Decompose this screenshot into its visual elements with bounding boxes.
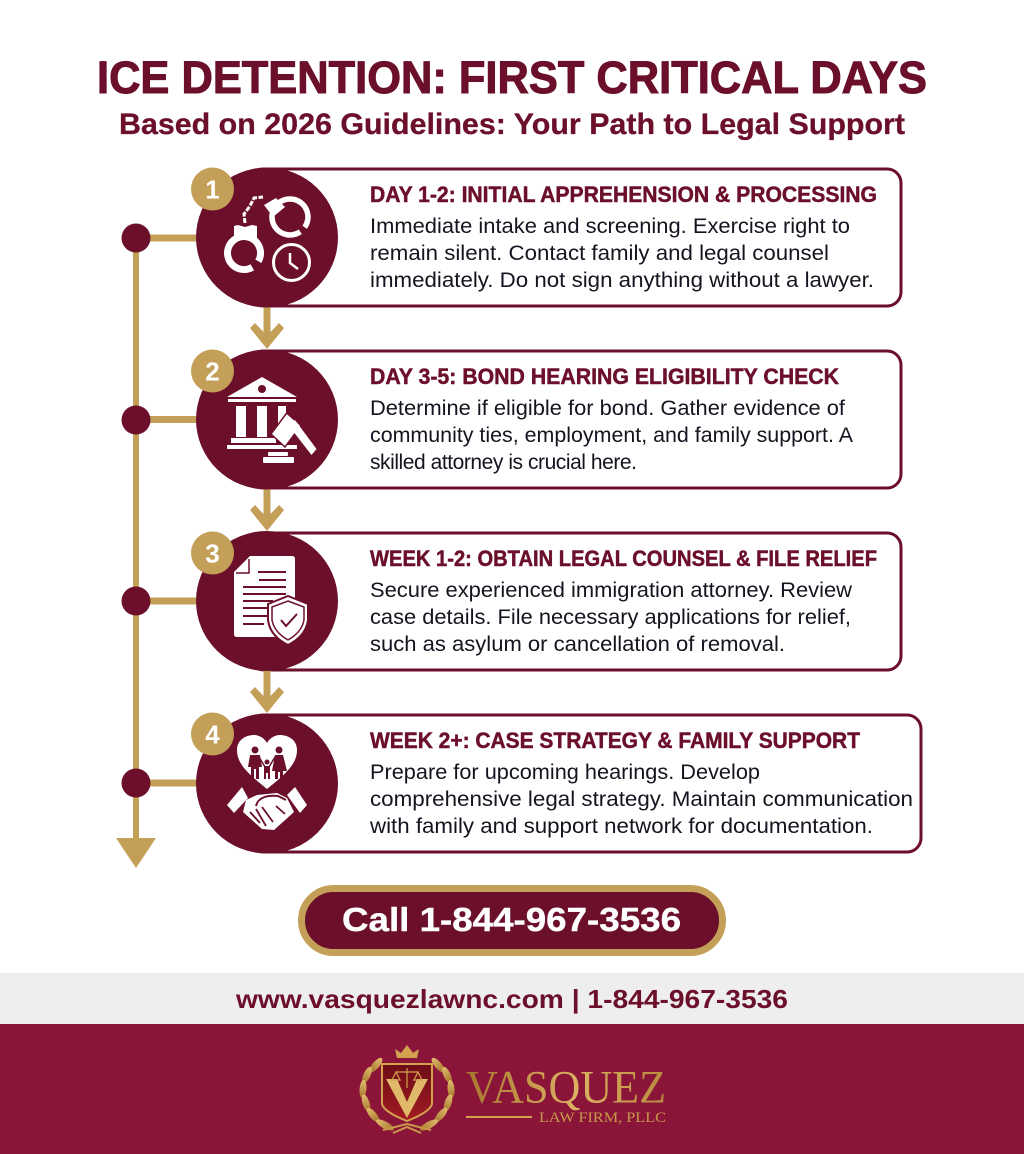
badge 3 (191, 532, 234, 574)
card 2 body: Determine if eligible for bond. Gather evidence of (370, 397, 845, 420)
badge 4: 4 (205, 720, 220, 750)
footer band (0, 1024, 1024, 1154)
card 3 body: case details. File necessary applications for relief, (370, 606, 851, 629)
icon: courthouse (227, 377, 297, 449)
card 2 heading: DAY 3-5: BOND HEARING ELIGIBILITY CHECK (370, 364, 840, 389)
card 3 body (370, 579, 853, 656)
card 2 body: skilled attorney is crucial here. (370, 451, 637, 474)
icon: clock (274, 244, 310, 280)
logo (359, 1045, 666, 1133)
title: ICE DETENTION: FIRST CRITICAL DAYS (97, 52, 927, 103)
logo crest (359, 1045, 455, 1133)
card 2 body (370, 397, 853, 474)
card 1 body: Immediate intake and screening. Exercise right to (370, 215, 850, 238)
subtitle: Based on 2026 Guidelines: Your Path to Legal Support (119, 108, 905, 141)
badge 1: 1 (205, 174, 220, 204)
card 2 (250, 351, 901, 488)
card 4 body: comprehensive legal strategy. Maintain communication (370, 788, 913, 811)
icon: document (234, 556, 295, 637)
arrow 1 to 2 (250, 306, 284, 349)
icon: handcuffs (228, 197, 308, 270)
card 1 (250, 169, 901, 306)
contact bar: www.vasquezlawnc.com | 1-844-967-3536 (235, 984, 788, 1014)
card 4 body: Prepare for upcoming hearings. Develop (370, 761, 760, 784)
timeline node 2 (122, 406, 198, 434)
card 1 body: immediately. Do not sign anything without a lawyer. (370, 269, 874, 292)
logo wordmark: VASQUEZ (466, 1062, 666, 1114)
call button: Call 1-844-967-3536 (342, 901, 681, 938)
badge 2: 2 (205, 356, 220, 386)
contact bar (0, 973, 1024, 1024)
icon: gavel (263, 413, 316, 463)
step 3 circle with document and shield icon (196, 531, 338, 671)
timeline node 3 (122, 586, 198, 616)
arrow 2 to 3 (250, 488, 284, 531)
card 4 body: with family and support network for documentation. (369, 815, 873, 838)
timeline node 1 (122, 224, 198, 252)
badge 4 (191, 712, 234, 756)
badge 2 (191, 350, 234, 392)
card 4 body (369, 761, 913, 838)
icon: heart with family (237, 735, 297, 789)
card 4 (250, 715, 921, 852)
card 1 body (370, 215, 874, 292)
step 1 circle with handcuffs and clock icon (196, 168, 338, 308)
logo subtitle: LAW FIRM, PLLC (539, 1110, 666, 1126)
timeline node 4 (122, 768, 198, 798)
card 3 (250, 533, 901, 670)
logo rule (466, 1116, 532, 1118)
icon: shield (268, 596, 308, 645)
call button (302, 888, 722, 952)
card 4 heading: WEEK 2+: CASE STRATEGY & FAMILY SUPPORT (370, 728, 860, 753)
arrow 3 to 4 (250, 670, 284, 713)
badge 3: 3 (205, 538, 220, 568)
card 3 body: such as asylum or cancellation of removal. (370, 633, 785, 656)
card 2 body: community ties, employment, and family support. A (370, 424, 853, 447)
card 3 body: Secure experienced immigration attorney. Review (370, 579, 853, 602)
card 3 heading: WEEK 1-2: OBTAIN LEGAL COUNSEL & FILE RELIEF (370, 546, 877, 571)
timeline: vertical line with arrowhead (116, 238, 156, 868)
step 4 circle with family heart and handshake icon (196, 714, 338, 854)
step 2 circle with courthouse and gavel icon (196, 350, 338, 490)
badge 1 (191, 168, 234, 210)
card 1 body: remain silent. Contact family and legal counsel (370, 242, 829, 265)
icon: handshake (227, 787, 307, 830)
card 1 heading: DAY 1-2: INITIAL APPREHENSION & PROCESSING (370, 182, 877, 207)
